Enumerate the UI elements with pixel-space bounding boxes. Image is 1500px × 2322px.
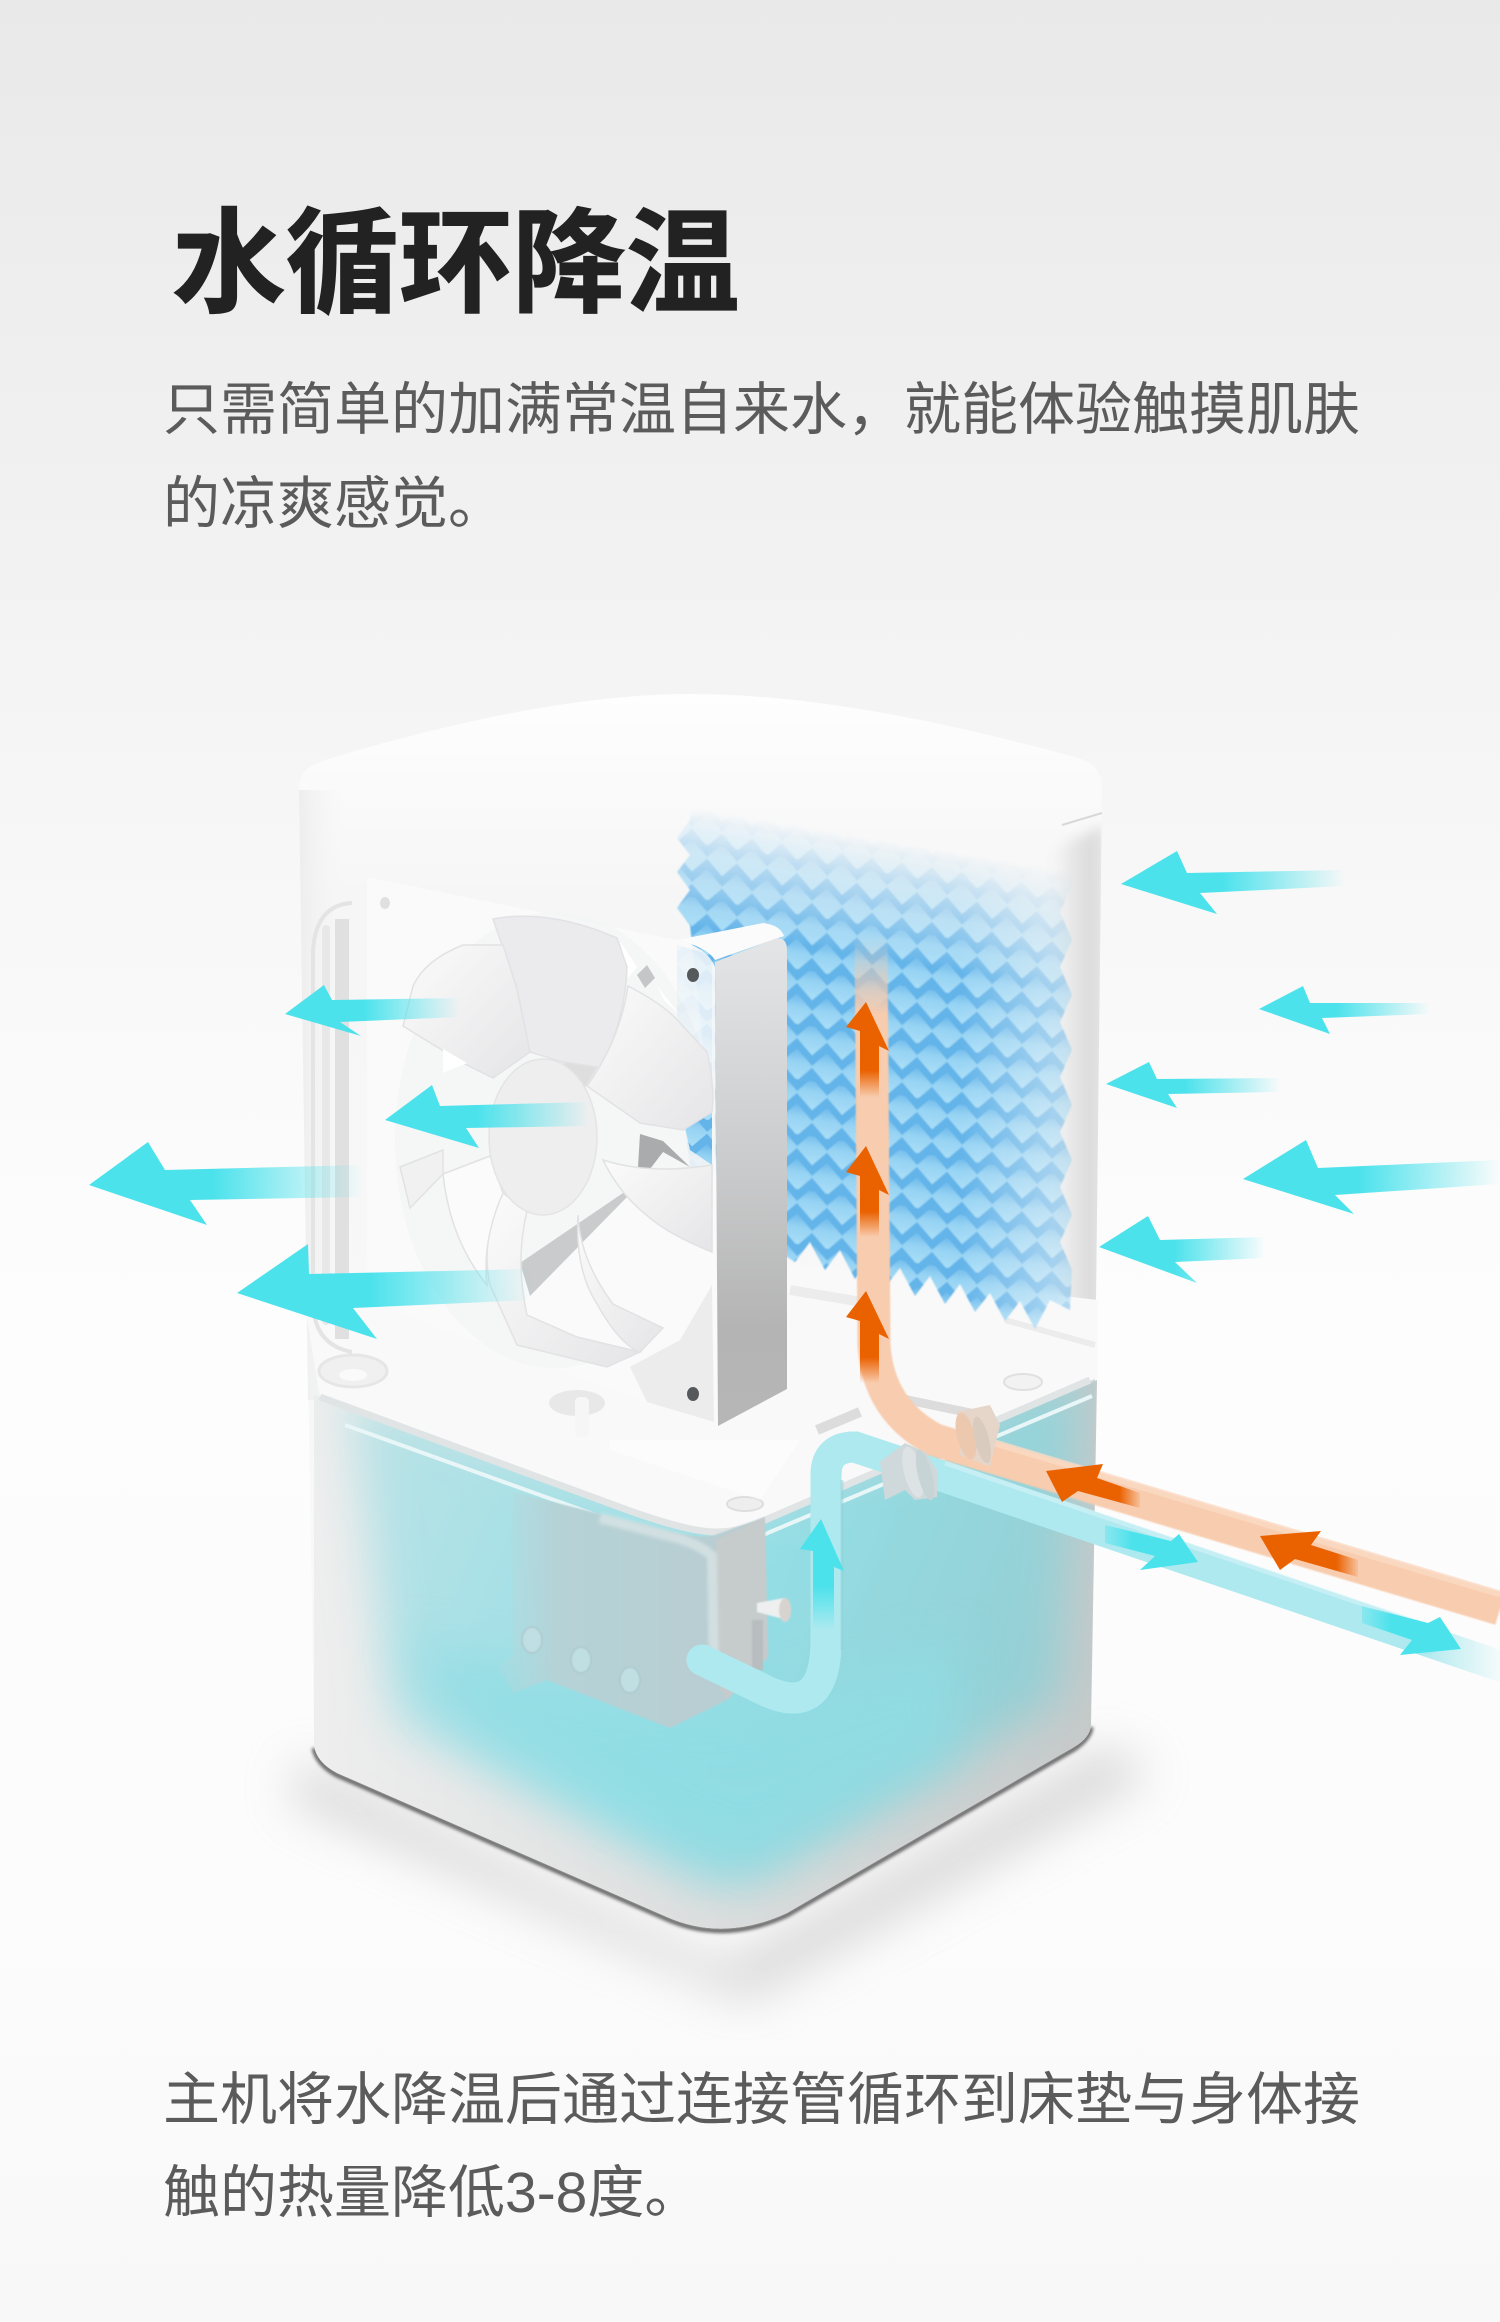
bottom description — [163, 2068, 1360, 2225]
screw holes — [687, 968, 699, 1401]
title: 水循环降温 — [172, 201, 740, 328]
left wall shading — [299, 790, 345, 1400]
arrow: exhaust 1 — [285, 985, 460, 1036]
arrow: cold out 2 — [1362, 1606, 1461, 1655]
right wall shading — [1063, 826, 1102, 1382]
air intake arrows — [1099, 851, 1500, 1283]
lower tank shell — [314, 1380, 1097, 1929]
hot water pipe — [871, 935, 1500, 1609]
fan hub — [489, 1059, 597, 1215]
arrow: exhaust 4 — [237, 1244, 531, 1339]
interior floor and tank rim — [304, 1265, 1098, 1547]
arrow: hot up 2 — [846, 1146, 889, 1237]
arrow: exhaust 2 — [385, 1085, 589, 1148]
filter seen through frame — [677, 945, 712, 1230]
arrow: intake 1 — [1121, 851, 1345, 914]
intro text — [163, 378, 1360, 536]
fan front frame — [367, 877, 717, 1424]
arrow: intake 2 — [1259, 986, 1430, 1034]
arrow: hot return 2 — [1260, 1531, 1358, 1577]
fan struts — [637, 965, 655, 988]
fan — [367, 877, 787, 1426]
arrow: intake 5 — [1099, 1216, 1266, 1283]
intro text: 的凉爽感觉。 — [163, 472, 505, 536]
fan top face — [677, 923, 784, 960]
hot flow arrows — [846, 1002, 1358, 1577]
heat exchanger box — [497, 1492, 791, 1728]
fan blades — [400, 916, 713, 1367]
cold water pipe — [702, 1447, 1500, 1698]
evaporative filter honeycomb — [677, 790, 1072, 1329]
bottom description: 主机将水降温后通过连接管循环到床垫与身体接 — [163, 2068, 1360, 2132]
arrow: exhaust 3 — [89, 1142, 363, 1225]
water tank — [348, 1365, 1082, 1886]
pipe connectors — [880, 1405, 1000, 1502]
arrow: cold up — [800, 1519, 844, 1630]
device body — [299, 694, 1105, 1929]
floor details — [319, 1355, 387, 1387]
bolts — [522, 1627, 640, 1693]
bottom description: 触的热量降低3-8度。 — [163, 2161, 701, 2225]
pin — [757, 1598, 787, 1620]
arrow: cold out 1 — [1105, 1525, 1198, 1570]
product diagram: water cooling unit — [89, 694, 1500, 2009]
cap seam — [1062, 813, 1102, 825]
arrow: hot up 3 — [846, 1291, 889, 1383]
floor shadow — [290, 1727, 1150, 2000]
air exhaust arrows — [89, 985, 589, 1339]
arrow: intake 4 — [1243, 1140, 1500, 1214]
box side face — [716, 1517, 768, 1700]
rear vent slot — [313, 903, 352, 1352]
arrow: intake 3 — [1106, 1062, 1281, 1108]
intro text: 只需简单的加满常温自来水，就能体验触摸肌肤 — [163, 378, 1360, 442]
arrow: hot return 1 — [1046, 1464, 1140, 1508]
fan housing opening — [395, 912, 715, 1368]
fan opening floor — [520, 1195, 712, 1367]
cold flow arrows — [800, 1519, 1461, 1655]
arrow: hot up 1 — [846, 1002, 889, 1097]
fan side panel — [715, 938, 787, 1426]
